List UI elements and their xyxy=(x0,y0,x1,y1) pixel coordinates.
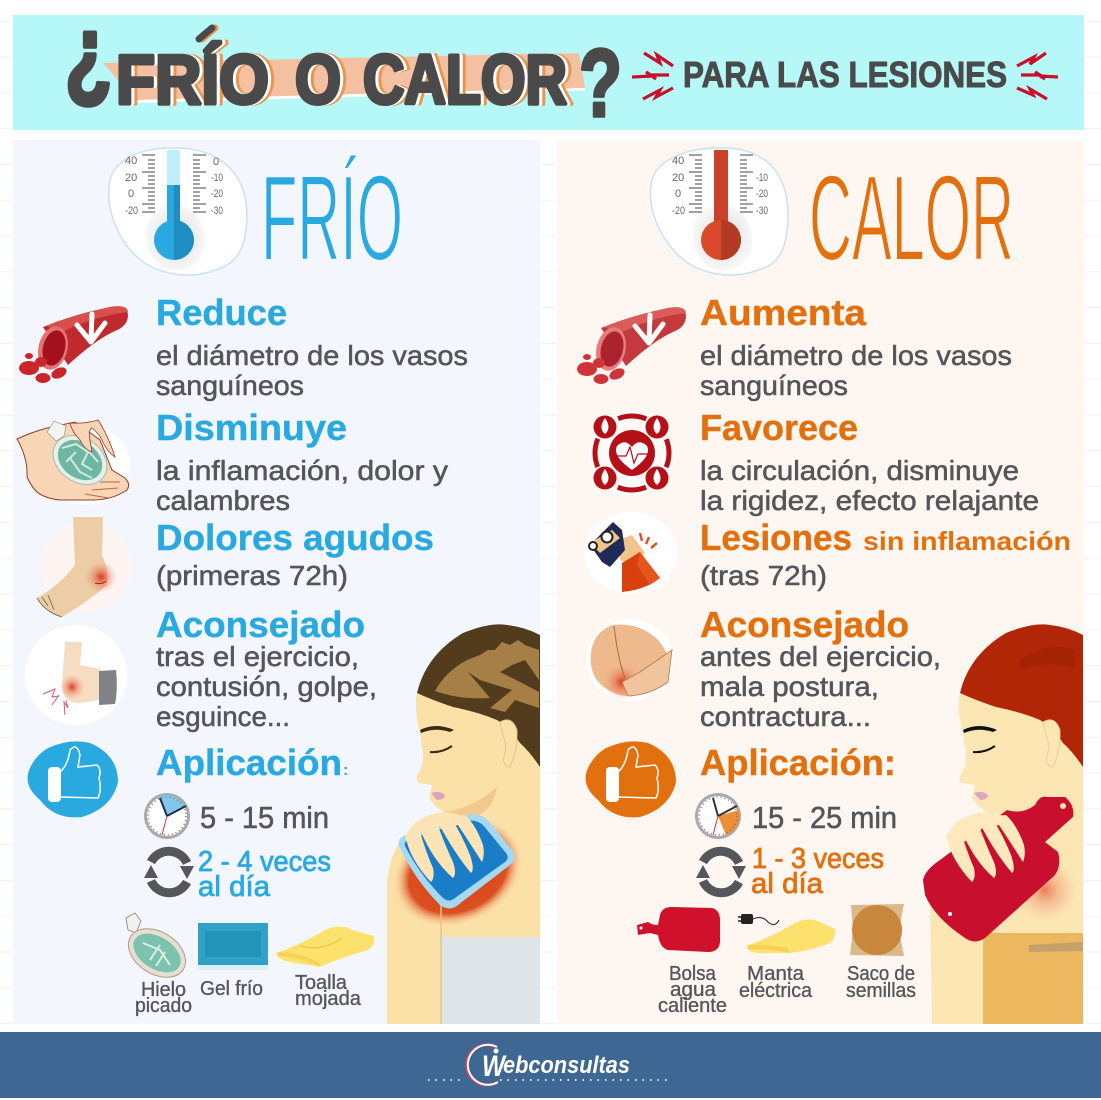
text: aconsejado: tras el ejercicio, xyxy=(156,641,359,672)
logo: webconsultas: W xyxy=(482,1050,507,1083)
text: reduce xyxy=(156,292,468,401)
text: aconsejado: contusión, golpe, xyxy=(156,671,377,702)
label: manta eléctrica: eléctrica xyxy=(739,980,813,1002)
label: gel frío: Gel frío xyxy=(200,978,263,1000)
brush stroke behind title xyxy=(103,53,585,103)
title: ¿FRÍO O CALOR? xyxy=(65,0,622,137)
icon: wet towel xyxy=(276,926,374,967)
title: ¿FRÍO O CALOR?: O xyxy=(295,40,341,118)
label: saco de semillas: semillas xyxy=(846,980,916,1002)
text: lesiones sin inflamación: sin inflamación xyxy=(863,526,1071,556)
panel: calor xyxy=(557,140,1084,1024)
label: hielo picado: picado xyxy=(135,995,192,1017)
subtitle: para las lesiones: PARA LAS LESIONES xyxy=(683,54,1007,95)
text: aconsejado: esguince... xyxy=(156,701,290,732)
label: toalla mojada xyxy=(295,972,362,1010)
text: aconsejado xyxy=(156,604,377,732)
illustration: woman with hot water bottle xyxy=(923,624,1083,1024)
icon: cold thermometer: -20 xyxy=(211,188,223,200)
text: reduce: el diámetro de los vasos xyxy=(156,340,468,371)
text: reduce: sanguíneos xyxy=(156,370,304,401)
footer band xyxy=(0,1032,1101,1098)
text: aconsejado: Aconsejado xyxy=(156,604,365,645)
label: manta eléctrica xyxy=(739,963,813,1002)
icon: hot thermometer: -10 xyxy=(756,172,768,184)
text: 1 - 3 veces al día xyxy=(751,843,884,900)
label: saco de semillas xyxy=(846,963,916,1002)
text: aplicación: Aplicación xyxy=(156,742,342,783)
text: dolores agudos: (primeras 72h) xyxy=(156,560,348,591)
icon: blood vessel xyxy=(577,307,686,384)
title: ¿FRÍO O CALOR?: CALOR xyxy=(363,40,567,118)
icon: seed bag xyxy=(850,904,904,956)
icon: hot thermometer xyxy=(650,148,788,275)
text: favorece xyxy=(700,407,1039,516)
title: ¿FRÍO O CALOR?: FRÍO xyxy=(122,40,275,118)
icon: ice bag on foot xyxy=(17,420,130,505)
icon: hot thermometer: 0 xyxy=(675,188,681,200)
panel: header banner xyxy=(13,0,1084,137)
label: bolsa agua caliente: Bolsa xyxy=(669,963,717,985)
icon: clock xyxy=(695,793,741,839)
text: disminuye xyxy=(156,407,448,516)
title: ¿FRÍO O CALOR?: FRÍO xyxy=(119,40,272,118)
title: ¿FRÍO O CALOR?: O xyxy=(298,40,344,118)
logo: webconsultas: ebconsultas xyxy=(503,1052,630,1079)
panel: frío xyxy=(13,140,542,1024)
text: 1 - 3 veces al día: 1 - 3 veces xyxy=(752,843,884,875)
text: disminuye: Disminuye xyxy=(156,407,347,448)
text: favorece: la circulación, disminuye xyxy=(700,455,1019,486)
title: ¿FRÍO O CALOR?: CALOR xyxy=(366,40,570,118)
label: manta eléctrica: Manta xyxy=(747,963,805,985)
icon: back pain xyxy=(586,619,674,701)
title: ¿FRÍO O CALOR?: CALOR xyxy=(369,40,573,118)
text: dolores agudos xyxy=(156,517,434,591)
icon: circulation heart xyxy=(589,410,675,496)
icon: hot thermometer: 20 xyxy=(672,172,684,184)
label: bolsa agua caliente xyxy=(658,963,727,1017)
text: aconsejado xyxy=(700,604,941,732)
icon: neck pain xyxy=(584,512,678,594)
label: saco de semillas: Saco de xyxy=(847,963,915,985)
icon: cold thermometer: -10 xyxy=(211,172,223,184)
text: reduce: Reduce xyxy=(156,292,287,333)
illustration: woman with gel pack xyxy=(374,624,542,1024)
text: aconsejado: contractura... xyxy=(700,701,871,732)
title: ¿FRÍO O CALOR?: FRÍO xyxy=(116,40,269,118)
logo: webconsultas xyxy=(466,1045,630,1085)
label: toalla mojada: Toalla xyxy=(295,972,348,994)
text: aplicación: : xyxy=(343,762,348,779)
icon: clock xyxy=(144,793,190,839)
label: bolsa agua caliente: agua xyxy=(670,979,717,1001)
text: aumenta xyxy=(700,292,1012,401)
title: ¿FRÍO O CALOR?: ? xyxy=(579,30,622,137)
icon: cold gel pack xyxy=(198,923,268,970)
icon: hot thermometer: -30 xyxy=(756,205,768,217)
icon: blood vessel xyxy=(19,306,128,383)
panel: frío: FRÍO xyxy=(261,150,403,286)
label: hielo picado: Hielo xyxy=(141,979,186,1001)
icon: bruised elbow xyxy=(25,625,127,725)
text: disminuye: la inflamación, dolor y xyxy=(156,455,448,486)
icon: repeat arrows xyxy=(144,851,194,893)
icon: hot thermometer: 40 xyxy=(672,155,684,167)
dotted rule xyxy=(428,1079,672,1081)
text: 2 - 4 veces al día xyxy=(198,846,331,903)
icon: cold thermometer xyxy=(109,148,247,275)
text: disminuye: calambres xyxy=(156,485,290,516)
label: hielo picado xyxy=(135,979,192,1017)
text: aumenta: sanguíneos xyxy=(700,370,848,401)
icon: hot thermometer: -20 xyxy=(756,188,768,200)
text: aumenta: el diámetro de los vasos xyxy=(700,340,1012,371)
text: favorece: la rigidez, efecto relajante xyxy=(700,485,1039,516)
text: aconsejado: mala postura, xyxy=(700,671,879,702)
text: aconsejado: antes del ejercicio, xyxy=(700,641,941,672)
icon: repeat arrows xyxy=(696,851,746,893)
text: 1 - 3 veces al día: al día xyxy=(751,868,824,900)
text: lesiones sin inflamación xyxy=(700,517,1071,591)
icon: right lightning bolts xyxy=(1017,53,1058,99)
icon: thumbs up xyxy=(28,741,118,817)
icon: cold thermometer: 20 xyxy=(125,172,137,184)
icon: injured ankle xyxy=(37,517,131,617)
icon: electric blanket xyxy=(738,914,835,953)
icon: thumbs up xyxy=(586,741,676,817)
text: 5 - 15 min: 5 - 15 min xyxy=(200,800,329,835)
icon: crushed ice bag xyxy=(120,913,194,987)
icon: hot water bottle xyxy=(637,907,720,952)
text: 2 - 4 veces al día: 2 - 4 veces xyxy=(198,846,331,878)
icon: cold thermometer: -20 xyxy=(125,205,138,217)
text: 15 - 25 min: 15 - 25 min xyxy=(752,800,897,835)
icon: cold thermometer: 0 xyxy=(128,188,134,200)
title: ¿FRÍO O CALOR?: O xyxy=(301,40,347,118)
icon: cold thermometer: 0 xyxy=(213,156,219,168)
icon: cold thermometer: 40 xyxy=(125,155,137,167)
label: toalla mojada: mojada xyxy=(295,988,362,1010)
text: aumenta: Aumenta xyxy=(700,292,867,333)
text: dolores agudos: Dolores agudos xyxy=(156,517,434,558)
text: lesiones sin inflamación: Lesiones xyxy=(700,517,852,558)
text: favorece: Favorece xyxy=(700,407,858,448)
text: 2 - 4 veces al día: al día xyxy=(198,871,271,903)
icon: cold thermometer: -30 xyxy=(211,205,223,217)
icon: left lightning bolts xyxy=(632,53,673,99)
text: aconsejado: Aconsejado xyxy=(700,604,909,645)
label: bolsa agua caliente: caliente xyxy=(658,995,727,1017)
text: aplicación: Aplicación: xyxy=(700,742,896,783)
text: lesiones sin inflamación: (tras 72h) xyxy=(700,560,827,591)
icon: hot thermometer: -20 xyxy=(672,205,685,217)
